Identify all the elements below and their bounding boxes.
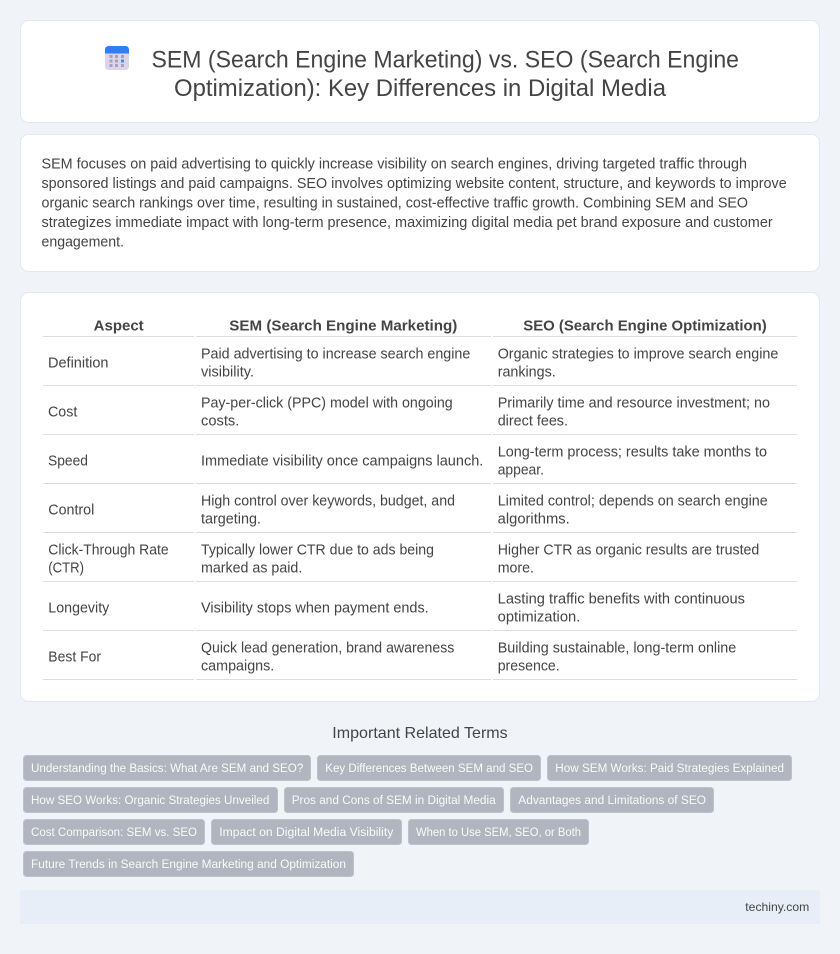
row: definition: Definition (48, 355, 108, 371)
tag list: related terms (24, 756, 792, 876)
tag: Cost Comparison: SEM vs. SEO (31, 825, 197, 839)
table header: SEO (Search Engine Optimization) (523, 319, 767, 335)
table header: Aspect (94, 319, 144, 335)
tag (24, 820, 204, 844)
panel: comparison table (20, 292, 820, 702)
row: definition: rankings. (498, 364, 556, 380)
icon: calendar (105, 46, 129, 70)
tag (548, 756, 792, 780)
tag (24, 756, 310, 780)
row: click-through rate: Click-Through Rate (48, 543, 169, 559)
row: longevity: optimization. (498, 610, 580, 626)
row: click-through rate (43, 543, 797, 582)
row: longevity (43, 592, 797, 631)
tag: Understanding the Basics: What Are SEM and SEO? (31, 761, 304, 775)
tag: When to Use SEM, SEO, or Both (416, 825, 581, 839)
text block: summary (42, 156, 787, 250)
row: best for: Building sustainable, long-term online (498, 641, 736, 657)
footer: techiny.com (745, 900, 809, 914)
row: control: High control over keywords, budget, and (201, 494, 455, 510)
row: cost: Cost (48, 404, 77, 420)
tag (24, 852, 354, 876)
heading: important related terms: Important Related Terms (332, 725, 508, 742)
row: click-through rate: marked as paid. (201, 560, 302, 576)
row: click-through rate: (CTR) (48, 560, 84, 576)
row: cost: Pay-per-click (PPC) model with ongoing (201, 396, 453, 412)
row: definition: visibility. (201, 364, 254, 380)
text block: summary: sponsored listings and paid campaigns. SEO involves optimizing website content, structure, and keywords to improve (42, 176, 787, 192)
row: best for: Quick lead generation, brand awareness (201, 641, 454, 657)
row: speed: Speed (48, 453, 88, 469)
table header: SEM (Search Engine Marketing) (229, 319, 457, 335)
row: speed: Long-term process; results take months to (498, 445, 767, 461)
tag (408, 820, 588, 844)
row: speed (43, 445, 797, 484)
tag (510, 788, 714, 812)
tag: Pros and Cons of SEM in Digital Media (292, 793, 496, 807)
row: longevity: Lasting traffic benefits with continuous (498, 592, 745, 608)
tag (24, 788, 278, 812)
row: cost: Primarily time and resource investment; no (498, 396, 770, 412)
tag (212, 820, 402, 844)
tag: How SEO Works: Organic Strategies Unveiled (31, 793, 269, 807)
row: definition: Organic strategies to improve search engine (498, 347, 778, 363)
row: cost: direct fees. (498, 414, 568, 430)
row: control: targeting. (201, 512, 261, 528)
row: best for (43, 641, 797, 680)
text block: summary: organic search rankings over time, resulting in sustained, cost-effective traffic growth. Combining SEM and SEO (42, 195, 748, 211)
tag: Key Differences Between SEM and SEO (325, 761, 533, 775)
row: speed: appear. (498, 462, 544, 478)
text block: summary: strategizes immediate impact with long-term presence, maximizing digital media pet brand exposure and customer (42, 215, 773, 231)
row: control: algorithms. (498, 512, 570, 528)
row: cost (43, 396, 797, 435)
row: speed: Immediate visibility once campaigns launch. (201, 453, 483, 469)
panel: intro paragraph (20, 134, 820, 272)
tag (318, 756, 540, 780)
row: longevity: Visibility stops when payment ends. (201, 600, 429, 616)
row: click-through rate: more. (498, 560, 534, 576)
tag (284, 788, 504, 812)
tag: How SEM Works: Paid Strategies Explained (555, 761, 784, 775)
row: control: Limited control; depends on search engine (498, 494, 768, 510)
title: SEM (Search Engine Marketing) vs. SEO (Search Engine (152, 46, 739, 74)
row: control: Control (48, 502, 94, 518)
row: click-through rate: Higher CTR as organic results are trusted (498, 543, 759, 559)
text block: summary: SEM focuses on paid advertising to quickly increase visibility on search engines, driving targeted traffic through (42, 156, 747, 172)
row: definition (43, 347, 797, 386)
row: click-through rate: Typically lower CTR due to ads being (201, 543, 434, 559)
row: cost: costs. (201, 414, 239, 430)
tag: Future Trends in Search Engine Marketing and Optimization (31, 857, 346, 871)
row: longevity: Longevity (48, 600, 110, 616)
panel: title header (20, 20, 820, 122)
table header (43, 319, 797, 337)
tag: Advantages and Limitations of SEO (518, 793, 706, 807)
row: control (43, 494, 797, 533)
row: definition: Paid advertising to increase search engine (201, 347, 470, 363)
text block: summary: engagement. (42, 234, 124, 250)
footer (20, 890, 820, 924)
row: best for: Best For (48, 649, 101, 665)
title (152, 46, 739, 102)
tag: Impact on Digital Media Visibility (219, 825, 394, 839)
row: best for: campaigns. (201, 658, 274, 674)
title: Optimization): Key Differences in Digital Media (174, 75, 667, 102)
row: best for: presence. (498, 658, 560, 674)
